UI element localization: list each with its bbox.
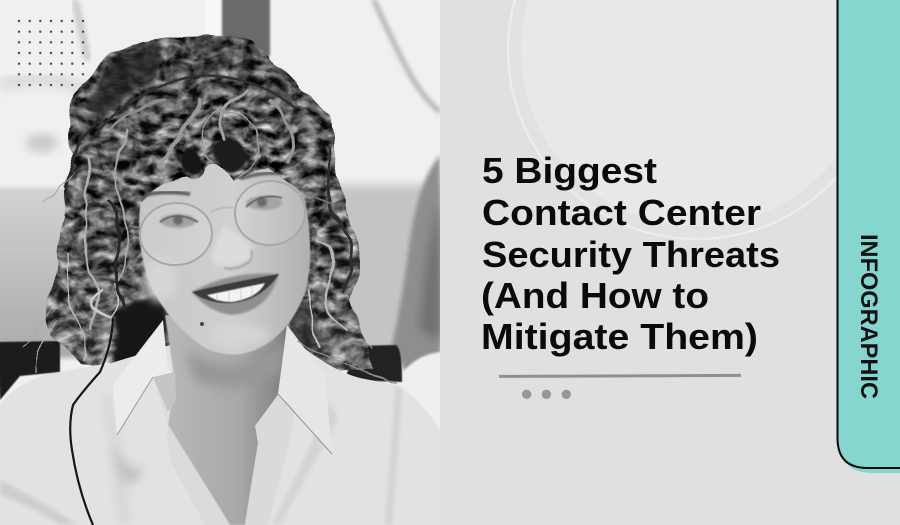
shirt collar left	[113, 320, 230, 525]
neck and chest	[165, 315, 290, 525]
title: Contact Center	[482, 192, 761, 233]
nose	[212, 225, 253, 269]
photo background	[0, 0, 440, 404]
title: Security Threats	[482, 234, 780, 275]
title: Mitigate Them)	[481, 316, 758, 357]
face	[135, 160, 310, 355]
divider line	[499, 375, 741, 376]
three dots	[522, 390, 571, 399]
shirt	[0, 345, 445, 525]
eyebrows	[135, 173, 290, 199]
tab label: INFOGRAPHIC	[855, 234, 882, 399]
dot grid	[18, 20, 84, 86]
panel: right background	[507, 0, 836, 240]
office chairs	[0, 341, 402, 400]
title: (And How to	[481, 275, 709, 316]
background person at right	[390, 154, 440, 372]
smile	[192, 273, 279, 315]
eyes	[160, 196, 282, 228]
headset cable	[70, 318, 113, 525]
title: 5 Biggest	[482, 150, 657, 191]
hair back mass with texture	[40, 25, 380, 380]
headband	[95, 76, 295, 135]
title	[481, 150, 780, 357]
curly hair strands	[24, 90, 395, 380]
fringe over forehead	[130, 97, 318, 204]
glasses	[130, 178, 335, 268]
shirt collar right	[245, 325, 332, 525]
mole	[200, 322, 204, 326]
photo: smiling woman with headset	[0, 0, 450, 525]
panel: teal infographic tab	[838, 0, 900, 473]
